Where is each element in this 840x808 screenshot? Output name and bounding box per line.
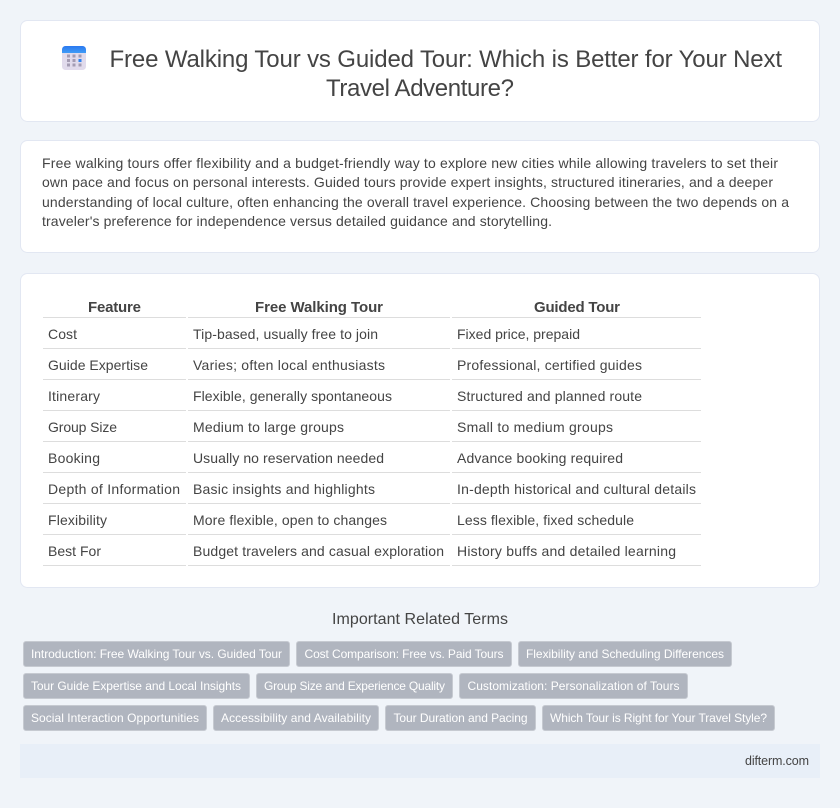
- tag: [214, 706, 378, 730]
- table row: guide expertise: Guide Expertise: [48, 357, 148, 373]
- table row: flexibility: [43, 512, 701, 535]
- panel: introduction: [20, 140, 820, 252]
- title: Free Walking Tour vs Guided Tour: Which is Better for Your Next: [110, 46, 782, 73]
- table row: guide expertise: Professional, certified guides: [457, 357, 642, 373]
- tag: [24, 642, 290, 666]
- title: Travel Adventure?: [326, 75, 514, 102]
- tag: Social Interaction Opportunities: [31, 711, 199, 725]
- table row: depth of information: In-depth historical and cultural details: [457, 481, 696, 497]
- table row: best for: History buffs and detailed learning: [457, 543, 676, 559]
- tag: [256, 674, 452, 698]
- table row: cost: Tip-based, usually free to join: [193, 326, 378, 342]
- tag: [518, 642, 732, 666]
- table header row: Feature: [88, 299, 141, 316]
- tag: [460, 674, 688, 698]
- footer bar: difterm.com: [745, 754, 809, 768]
- heading: related terms: Important Related Terms: [332, 611, 508, 628]
- tag: [542, 706, 774, 730]
- table row: cost: Fixed price, prepaid: [457, 326, 580, 342]
- footer bar: [20, 744, 820, 778]
- table row: booking: Usually no reservation needed: [193, 450, 384, 466]
- tag: Tour Guide Expertise and Local Insights: [31, 679, 241, 693]
- text block: introduction paragraph: [42, 155, 789, 229]
- table row: itinerary: [43, 388, 701, 411]
- table row: booking: Booking: [48, 450, 100, 466]
- tag: Introduction: Free Walking Tour vs. Guided Tour: [31, 647, 282, 661]
- tag: Group Size and Experience Quality: [264, 679, 445, 693]
- table row: itinerary: Itinerary: [48, 388, 100, 404]
- text block: introduction paragraph: own pace and focus on personal interests. Guided tours provide expert insights, structured itineraries, and a deeper: [42, 174, 773, 190]
- table row: group size: Medium to large groups: [193, 419, 344, 435]
- tag: [296, 642, 512, 666]
- tag: Which Tour is Right for Your Travel Style?: [550, 711, 767, 725]
- table row: itinerary: Flexible, generally spontaneous: [193, 388, 392, 404]
- title: [110, 46, 782, 102]
- panel: comparison table: [20, 274, 820, 588]
- table header row: Guided Tour: [534, 299, 620, 316]
- table row: best for: Budget travelers and casual exploration: [193, 543, 444, 559]
- table row: flexibility: Flexibility: [48, 512, 107, 528]
- table row: depth of information: Basic insights and highlights: [193, 481, 375, 497]
- table header row: Free Walking Tour: [255, 299, 383, 316]
- text block: introduction paragraph: Free walking tours offer flexibility and a budget-friendly way to explore new cities while allowing travelers to set their: [42, 155, 778, 171]
- table row: group size: Group Size: [48, 419, 117, 435]
- icon: calendar: [62, 46, 86, 70]
- table row: depth of information: [43, 481, 701, 504]
- tag: Cost Comparison: Free vs. Paid Tours: [304, 647, 504, 661]
- table row: best for: [43, 543, 701, 566]
- table row: depth of information: Depth of Information: [48, 481, 180, 497]
- tag: [24, 674, 250, 698]
- text block: introduction paragraph: traveler's preference for independence versus detailed guidance and storytelling.: [42, 213, 552, 229]
- tag: [24, 706, 206, 730]
- table row: guide expertise: [43, 357, 701, 380]
- text block: introduction paragraph: understanding of local culture, often enhancing the overall travel experience. Choosing between the two depends on a: [42, 194, 789, 210]
- panel: title header: [20, 20, 820, 122]
- table row: cost: Cost: [48, 326, 77, 342]
- table row: cost: [43, 326, 701, 349]
- table header row: [43, 299, 701, 318]
- tag: Flexibility and Scheduling Differences: [526, 647, 724, 661]
- table row: booking: Advance booking required: [457, 450, 623, 466]
- tag: Accessibility and Availability: [221, 711, 371, 725]
- table row: itinerary: Structured and planned route: [457, 388, 642, 404]
- table row: flexibility: More flexible, open to changes: [193, 512, 387, 528]
- tag: [386, 706, 536, 730]
- table row: guide expertise: Varies; often local enthusiasts: [193, 357, 385, 373]
- table row: booking: [43, 450, 701, 473]
- table row: flexibility: Less flexible, fixed schedule: [457, 512, 634, 528]
- tag list: related terms: [24, 642, 774, 730]
- table row: group size: Small to medium groups: [457, 419, 613, 435]
- table row: group size: [43, 419, 701, 442]
- tag: Customization: Personalization of Tours: [468, 679, 680, 693]
- table row: best for: Best For: [48, 543, 101, 559]
- tag: Tour Duration and Pacing: [394, 711, 528, 725]
